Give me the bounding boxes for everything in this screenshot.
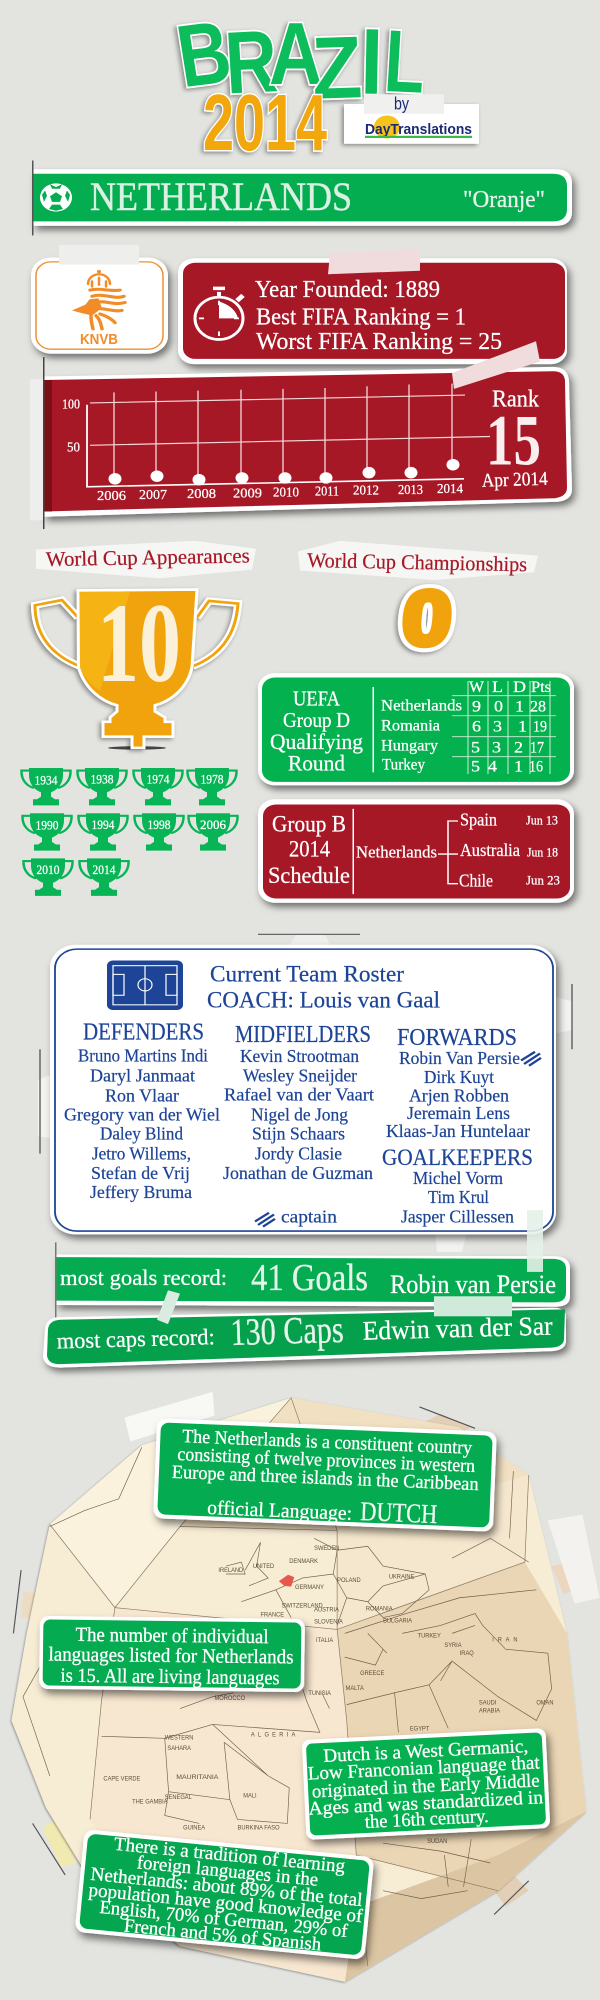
map country labels: MAURITANIA [176,1775,218,1781]
legend: captain: captain [281,1207,337,1227]
standings table: 0 [494,697,503,715]
heading: NETHERLANDS: NETHERLANDS [90,175,352,219]
standings table: 28 [530,697,546,715]
record banner: most caps: 130 Caps [230,1308,344,1353]
number: 0 championships: 0 [399,575,455,661]
map country labels: SENEGAL [165,1795,193,1801]
axis labels [62,397,463,504]
standings table: W [469,678,484,696]
Netherlands highlight [279,1575,294,1587]
icon: stopwatch [195,288,243,339]
map country labels: GREECE [360,1671,384,1677]
map country labels: GUINEA [183,1825,205,1831]
label: World Cup Championships: World Cup Championships [307,548,527,576]
roster column: defenders: Gregory van der Wiel [64,1105,220,1125]
title word: BRAZIL: B [171,3,238,107]
map country labels: GERMANY [295,1585,324,1591]
rank callout: Rank [492,385,539,412]
panel: FIFA rank chart [30,341,572,529]
panel title: Round [288,752,345,776]
cup: 2006: 2006 [200,818,226,833]
roster column: forwards and goalkeepers [382,1024,533,1227]
map country labels: BULGARIA [383,1618,412,1624]
panel: current team roster [38,934,573,1252]
record banner: most goals [55,1242,570,1321]
standings table: 3 [492,738,501,756]
map country labels: TURKEY [418,1633,441,1639]
info box: individual languages: The number of individual [75,1624,269,1648]
map country labels: SLOVENIA [314,1619,343,1626]
fixture bracket: Jun 23 [526,873,560,888]
info box: foreign languages: English, 70% of German, 29% of [99,1897,349,1942]
axis labels: 50 [67,440,80,455]
info box: Dutch language origin: Dutch is a West Germanic, [323,1736,529,1767]
number: 0 championships: 0 [399,575,455,661]
title word: BRAZIL: Z [310,19,364,118]
cup: 1938: 1938 [90,772,114,787]
info box: Dutch language origin: Low Franconian language that [307,1752,541,1785]
panel: team facts [178,250,567,364]
standings table: 6 [472,717,481,735]
roster heading: COACH: Louis van Gaal [207,987,440,1013]
map country labels: IRELAND [218,1568,243,1574]
title word: BRAZIL: R [222,12,280,113]
map country labels: ROMANIA [366,1606,393,1612]
info box: about the Netherlands: Europe and three islands in the Caribbean [171,1462,479,1495]
standings table: 5 [471,738,480,756]
map country labels: EGYPT [410,1726,430,1732]
fixture bracket [356,811,560,891]
axis labels: 2010 [273,485,299,500]
fixture bracket: Jun 13 [526,813,558,828]
tape: right [548,1515,600,1604]
axis labels: 2006 [97,489,126,504]
panel title: Group D [283,708,350,732]
cup: 1974 [133,768,183,805]
info box: Dutch language origin [302,1728,550,1840]
map country labels: TUNISIA [308,1691,331,1697]
map country labels: ARABIA [479,1708,500,1715]
map country labels: MOROCCO [215,1696,246,1702]
info box: Dutch language origin: Ages and was standardized in [308,1787,544,1820]
standings table: 16 [529,758,543,775]
logo text: KNVB: KNVB [80,331,118,348]
roster column: forwards and goalkeepers: Michel Vorm [413,1168,503,1189]
map country labels: SWITZERLAND [282,1604,323,1610]
roster column: forwards and goalkeepers: Robin Van Persie [399,1048,520,1069]
map country labels: MALI [243,1794,257,1800]
small cups: appearance years [21,768,238,896]
info box: about the Netherlands: The Netherlands is a constituent country [182,1426,473,1459]
map country labels: OMAN [536,1701,554,1707]
sponsor logo card: by DayTranslations [344,93,479,144]
info box: individual languages [39,1616,305,1692]
rank callout: Apr 2014 [481,469,549,491]
map country labels: DENMARK [289,1559,318,1565]
roster column: forwards and goalkeepers: Jeremain Lens [407,1103,510,1123]
map country labels: POLAND [337,1578,361,1584]
roster column: defenders: Ron Vlaar [105,1086,179,1106]
fixture bracket: Australia [460,841,521,860]
panel title [268,811,350,888]
map country labels: UKRAINE [389,1575,414,1581]
map country labels: THE GAMBIA [132,1800,168,1806]
map country labels: SAUDI [479,1701,497,1707]
facts text: Year Founded: 1889 [255,275,440,303]
info box: foreign languages: There is a tradition of learning [113,1834,347,1877]
icon: football [40,183,72,212]
roster column: forwards and goalkeepers: FORWARDS [397,1024,517,1050]
cup: 2010 [23,858,73,896]
axis labels: 2007 [139,488,167,503]
data points [108,459,460,485]
title word: BRAZIL: L [382,11,428,112]
standings table: Turkey [382,756,426,773]
map country labels: FRANCE [261,1613,284,1619]
record banner: most caps: Edwin van der Sar [362,1311,553,1346]
roster column: midfielders: MIDFIELDERS [235,1021,371,1048]
axis labels: 2014 [437,482,463,497]
roster heading: Current Team Roster [210,961,405,987]
map country labels: UNITED [253,1564,274,1570]
standings table: 1 [514,758,523,775]
icon: KNVB lion and crown [74,270,125,329]
record banner: most goals: most goals record: [60,1265,227,1291]
label: World Cup Appearances [36,541,256,578]
standings table: 19 [533,717,547,735]
roster column: forwards and goalkeepers: Tim Krul [428,1187,489,1208]
info box: Dutch language origin: originated in the Early Middle [311,1770,540,1803]
cup: 1990 [22,813,72,851]
map country labels: CAPE VERDE [103,1777,140,1783]
tapes and pins behind globe [13,1407,578,1914]
cup: 2010: 2010 [36,863,60,878]
info box: foreign languages: population have good knowledge of [88,1880,364,1927]
section: World Cup record and group tables [21,541,574,903]
info box: individual languages: is 15. All are living languages [60,1665,280,1689]
roster column: midfielders: Stijn Schaars [252,1124,345,1144]
axis labels: 2012 [353,483,379,498]
tape: top left [125,1392,215,1441]
roster column: defenders: DEFENDERS [83,1018,204,1045]
axis labels: 2009 [233,486,262,501]
info box: about the Netherlands: official Language: [207,1497,353,1525]
globe body [11,1398,586,1982]
facts text [255,275,502,355]
facts text: Worst FIFA Ranking = 25 [256,328,502,355]
panel title: Schedule [268,862,350,888]
cup: 2014: 2014 [92,863,116,878]
record banner: most caps [43,1308,566,1368]
roster heading [207,961,440,1013]
title word: BRAZIL: I [360,10,384,114]
cup: 1974: 1974 [146,772,170,787]
record banner: most caps: most caps record: [56,1325,215,1354]
standings table: L [492,678,503,696]
standings table: Romania [381,717,440,734]
info box: about the Netherlands: consisting of twelve provinces in western [177,1444,476,1477]
axis labels: 2013 [398,483,423,498]
axis labels: 2008 [187,487,216,502]
tapes on record banners [157,1210,543,1324]
panel title [270,687,363,776]
section: language facts on globe [11,1392,600,1982]
info box: foreign languages [75,1829,374,1960]
cup: 1938 [77,768,127,805]
map country labels: SUDAN [427,1839,447,1845]
legend: captain [255,1207,337,1227]
map country labels: SAHARA [167,1746,191,1752]
tape [328,250,420,274]
cup: 1978: 1978 [200,772,224,787]
rank callout [481,385,549,491]
info box: about the Netherlands [153,1418,497,1532]
roster column: forwards and goalkeepers: Jasper Cillessen [401,1207,514,1227]
title: Brazil 2014 [171,3,428,167]
title word: BRAZIL: A [269,5,322,103]
panel title: Group B [272,811,346,837]
roster column: forwards and goalkeepers: GOALKEEPERS [382,1144,533,1170]
standings table: 5 [471,758,480,775]
record banner: most goals: 41 Goals [251,1256,368,1299]
map country labels: AUSTRIA [314,1608,339,1614]
standings table: Netherlands [381,697,462,714]
standings table: 1 [518,717,527,735]
standings table: 17 [530,738,544,756]
trophy number: 10: 10 [97,581,181,706]
axis labels: 2011 [315,484,339,499]
cup: 1994 [78,813,128,851]
facts text: Best FIFA Ranking = 1 [256,303,466,330]
map country labels: ALGERIA [251,1732,297,1738]
cup: 2006 [188,813,238,851]
cup: 1978 [187,768,237,805]
standings table: 9 [472,697,481,715]
info box: foreign languages: Netherlands: about 89% of the total [90,1864,363,1911]
header banner: Netherlands [32,160,572,235]
standings table: 4 [488,758,498,775]
standings table: Hungary [381,737,439,754]
info box: foreign languages: French and 5% of Spanish [123,1916,323,1956]
axis labels: 100 [62,397,80,412]
map country labels [103,1546,554,1845]
panel: KNVB logo [31,245,168,354]
roster column: defenders [64,1018,220,1203]
roster column: midfielders: Nigel de Jong [251,1105,348,1125]
map country labels: ITALIA [316,1638,333,1644]
sponsor logo card: by DayTranslations: DayTranslations [365,121,472,138]
icon: large trophy with 10 appearances [35,581,238,750]
standings table: D [513,678,526,696]
standings table [381,678,556,775]
map country labels: BURKINA FASO [238,1825,280,1831]
number: 0 championships: 0 [399,575,455,661]
roster column: defenders: Stefan de Vrij [91,1163,190,1183]
cup: 1998 [134,813,184,851]
section: roster and records [38,934,573,1368]
standings table: Pts [531,678,551,696]
panel title: UEFA [293,687,341,710]
roster column: defenders: Daley Blind [100,1124,183,1144]
title year: 2014: 2014 [203,78,327,167]
map country labels: IRAQ [460,1651,474,1657]
roster column: forwards and goalkeepers: Dirk Kuyt [424,1067,494,1088]
record banner: most goals: Robin van Persie [390,1271,556,1299]
cup: 1934 [21,768,71,805]
title word: BRAZIL [171,3,428,118]
roster column: defenders: Jetro Willems, [92,1144,191,1164]
roster column: forwards and goalkeepers: Arjen Robben [409,1086,509,1106]
fixture bracket: Jun 18 [527,846,558,860]
map country borders [23,1447,554,1899]
roster column: midfielders: Jordy Clasie [255,1144,342,1164]
panel: Group B 2014 schedule [258,799,574,903]
cup: 1934: 1934 [34,773,58,788]
globe facets [50,1398,586,1982]
roster column: defenders: Jeffery Bruma [90,1182,192,1203]
roster column: defenders: Daryl Janmaat [90,1066,195,1086]
roster column: midfielders: Wesley Sneijder [243,1066,357,1086]
fixture bracket: Spain [460,811,498,830]
icon: captain mark [521,1052,541,1066]
cup: 1998: 1998 [148,818,170,833]
map country labels: SWEDEN [314,1546,339,1552]
roster column: defenders: Bruno Martins Indi [78,1046,208,1066]
roster column: midfielders [223,1021,374,1183]
rank callout: 15 [486,400,541,481]
info box: Dutch language origin: the 16th century. [364,1806,489,1833]
fixture bracket: Chile [459,871,493,891]
globe with map of Europe and Africa [11,1392,600,1982]
map country labels: SYRIA [444,1643,462,1649]
info box: foreign languages: foreign languages in the [136,1852,319,1891]
map country labels: IRAN [492,1637,521,1643]
tape [452,341,540,389]
panel: UEFA Group D qualifying table [258,673,574,785]
cup: 1994: 1994 [92,818,114,833]
info box: about the Netherlands: DUTCH [360,1496,438,1529]
icon: football pitch [107,960,183,1010]
roster column: forwards and goalkeepers: Klaas-Jan Huntelaar [386,1121,530,1142]
panel title: Qualifying [270,730,363,754]
roster column: midfielders: Rafael van der Vaart [224,1085,374,1105]
cup: 1990: 1990 [36,819,58,833]
map country labels: MALTA [346,1686,364,1692]
roster column: midfielders: Kevin Strootman [240,1046,359,1067]
nickname: Oranje: "Oranje" [463,185,545,213]
label: World Cup Appearances: World Cup Appearances [46,544,250,571]
standings table: 2 [514,738,523,756]
panel title: 2014 [289,836,330,862]
label: World Cup Championships [298,541,538,580]
roster column: midfielders: Jonathan de Guzman [223,1163,373,1183]
map country labels: WESTERN [165,1735,193,1742]
sponsor logo card: by DayTranslations: by [394,93,409,113]
line chart: ranking by year [62,384,490,504]
standings table: 1 [515,697,524,715]
section: header and FIFA ranking [30,3,572,529]
standings table: 3 [493,717,502,735]
info box: individual languages: languages listed for Netherlands [48,1644,294,1668]
cup: 2014 [79,858,129,896]
fixture bracket: Netherlands [356,843,437,861]
